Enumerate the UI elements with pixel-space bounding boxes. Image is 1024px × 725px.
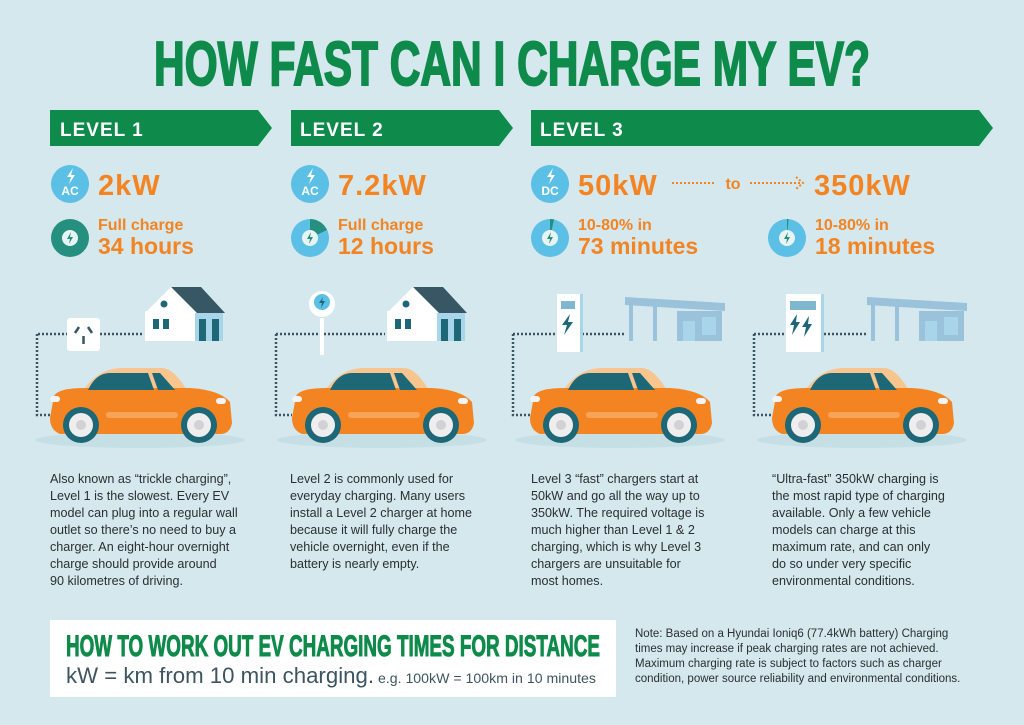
level 1 time [51,217,194,259]
text: level 3 350kW: do so under very specific [772,557,911,571]
level 1 time: 34 hours [98,233,194,259]
scene: level 3 50kW [513,294,725,448]
level 3 power range: 350kW [814,170,911,202]
banner: level 3 [531,110,993,146]
level 1 power: AC [61,184,79,198]
text: level 2: battery is nearly empty. [290,557,419,571]
banner: level 3: LEVEL 3 [540,120,624,141]
level 2 power: 7.2kW [338,170,427,202]
level 3 time 50kW: 10-80% in [578,217,652,234]
level 2 power: AC [301,184,319,198]
level 2 time: 12 hours [338,233,434,259]
text: level 2: install a Level 2 charger at home [290,506,472,520]
text: level 3 350kW: maximum rate, and can only [772,540,931,554]
scene: level 2 [276,287,487,448]
level 1 power: 2kW [98,170,161,202]
text: level 1: Level 1 is the slowest. Every EV [50,489,230,503]
banner: level 2: LEVEL 2 [300,120,384,141]
text: level 3 350kW: environmental conditions. [772,574,915,588]
text: level 3 50kW: Level 3 “fast” chargers start at [531,472,699,486]
text: level 3 50kW: charging, which is why Level 3 [531,540,701,554]
text: level 3 50kW: much higher than Level 1 & 2 [531,523,695,537]
formula box: kW = km from 10 min charging. e.g. 100kW = 100km in 10 minutes [66,663,596,688]
level 3 power range [531,165,911,203]
level 1 time: Full charge [98,217,183,234]
text: level 1: model can plug into a regular wall [50,506,238,520]
level 3 time 350kW [768,217,935,259]
text: level 1: charge should provide around [50,557,217,571]
text: level 2: vehicle overnight, even if the [290,540,450,554]
scene: level 3 350kW [754,294,967,448]
text: level 3 50kW: 350kW. The required voltage is [531,506,704,520]
banner: level 2 [291,110,513,146]
banner: level 1: LEVEL 1 [60,120,144,141]
formula box [50,620,616,697]
level 3 time 350kW: 18 minutes [815,233,935,259]
banner: level 1 [50,110,272,146]
level 3 time 50kW [531,217,698,259]
text: level 1: outlet so there’s no need to buy a [50,523,236,537]
text: level 2: Level 2 is commonly used for [290,472,453,486]
text: level 3 350kW: models can charge at this [772,523,916,537]
level 3 power range: 50kW [578,170,658,202]
text: level 2: because it will fully charge the [290,523,457,537]
text: level 3 350kW: “Ultra-fast” 350kW charging is [772,472,939,486]
text: level 2: everyday charging. Many users [290,489,465,503]
level 3 power range: DC [541,184,559,198]
scene: level 1 [35,287,245,448]
formula box: HOW TO WORK OUT EV CHARGING TIMES FOR DISTANCE [66,630,600,663]
level 2 time [291,217,434,259]
level 3 time 350kW: 10-80% in [815,217,889,234]
level 3 time 50kW: 73 minutes [578,233,698,259]
note: times may increase if peak charging rates are not achieved. [635,643,939,655]
note: Note: Based on a Hyundai Ioniq6 (77.4kWh battery) Charging [635,628,948,640]
note: Maximum charging rate is subject to factors such as charger [635,658,942,670]
text: level 3 50kW: chargers are unsuitable for [531,557,681,571]
level 2 power [291,165,427,203]
text: level 3 50kW: 50kW and go all the way up to [531,489,700,503]
text: level 1: Also known as “trickle charging”, [50,472,231,486]
level 1 power [51,165,161,203]
text: level 3 50kW: most homes. [531,574,603,588]
level 3 power range: to [725,176,741,193]
note: condition, power source reliability and environmental conditions. [635,673,960,685]
text: level 1: charger. An eight-hour overnight [50,540,230,554]
text: level 1: 90 kilometres of driving. [50,574,183,588]
text: level 3 350kW: available. Only a few vehicle [772,506,931,520]
text: level 3 350kW: the most rapid type of charging [772,489,945,503]
level 2 time: Full charge [338,217,423,234]
